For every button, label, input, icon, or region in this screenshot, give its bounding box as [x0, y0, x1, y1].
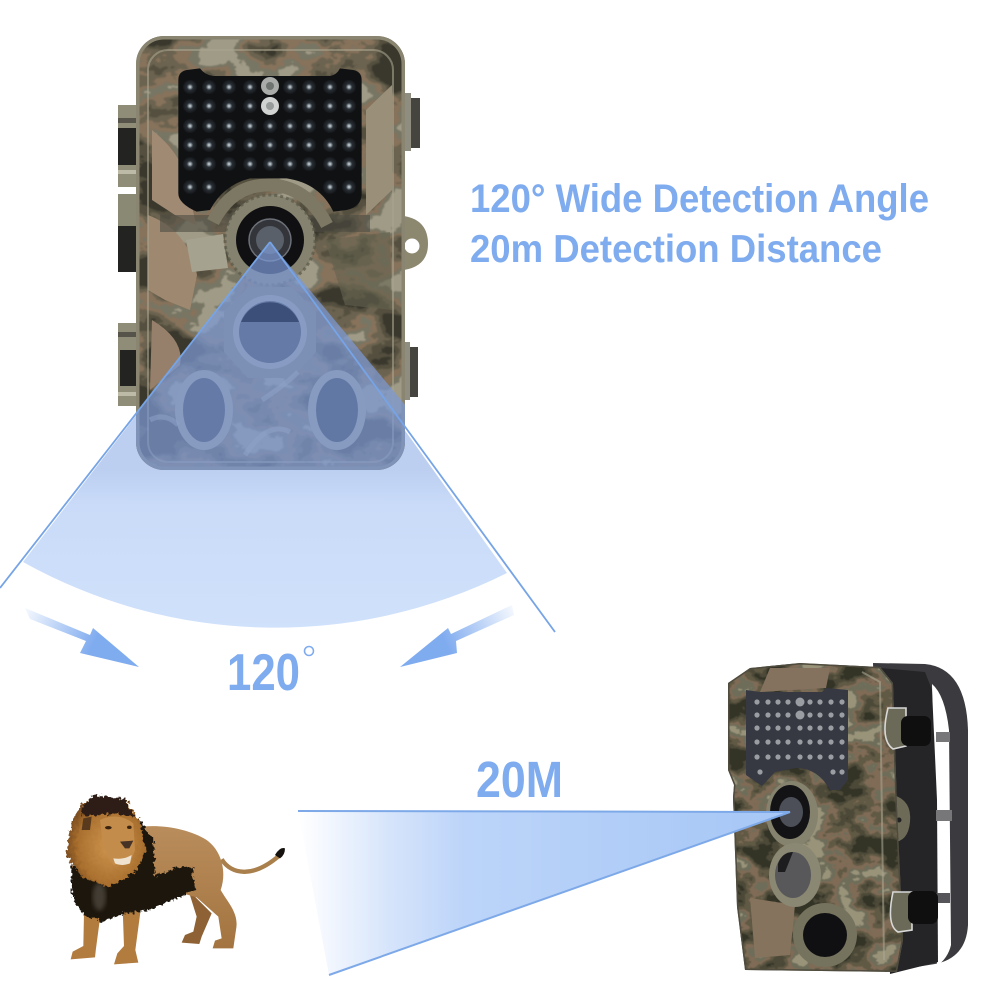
right strap clips: [404, 93, 420, 400]
mounting ear: [404, 216, 428, 270]
side camera: back housing and strap: [873, 663, 968, 974]
blue tinted overlay on camera inside the fan: [136, 244, 405, 470]
light twig streaks: [150, 372, 298, 455]
IR LED panel: [178, 68, 362, 212]
far hind leg: [182, 890, 212, 944]
side camera: camouflage front: [725, 660, 907, 975]
fan boundary lines: [0, 242, 555, 632]
detection fan: 120 degree field of view: [23, 242, 507, 628]
front right leg: [114, 900, 142, 964]
heading text: 120° Wide Detection Angle: [470, 177, 929, 221]
side camera: LED panel: [746, 688, 848, 790]
right arrow: [400, 605, 514, 667]
side camera: lens and sensors: [766, 781, 857, 967]
left sensor window: [175, 370, 233, 450]
right sensor window: [308, 370, 366, 450]
front left leg: [71, 913, 100, 959]
heading text: 20m Detection Distance: [470, 228, 882, 271]
dark crown: [82, 795, 135, 817]
left arrow: [25, 608, 139, 667]
body and near hind leg: [142, 826, 237, 948]
distance beam: [298, 811, 790, 975]
front camera: camouflage trail camera: [118, 36, 428, 470]
left strap clips: [118, 105, 144, 406]
distance label: 20M: [476, 751, 563, 808]
lion: [67, 795, 285, 964]
PIR sensor ring and window: [224, 287, 316, 378]
golden mane: [67, 796, 147, 887]
side camera: latches: [885, 708, 938, 932]
main lens: [225, 195, 315, 285]
face: [82, 817, 135, 865]
heading text: [470, 177, 929, 271]
grey mane highlight: [93, 883, 106, 911]
angle label: 120: [227, 644, 300, 702]
black mane: [71, 819, 195, 922]
dark top of PIR window: [241, 302, 299, 322]
camera body: [136, 36, 405, 470]
lens hood arch: [213, 185, 327, 225]
tail: [222, 848, 285, 872]
